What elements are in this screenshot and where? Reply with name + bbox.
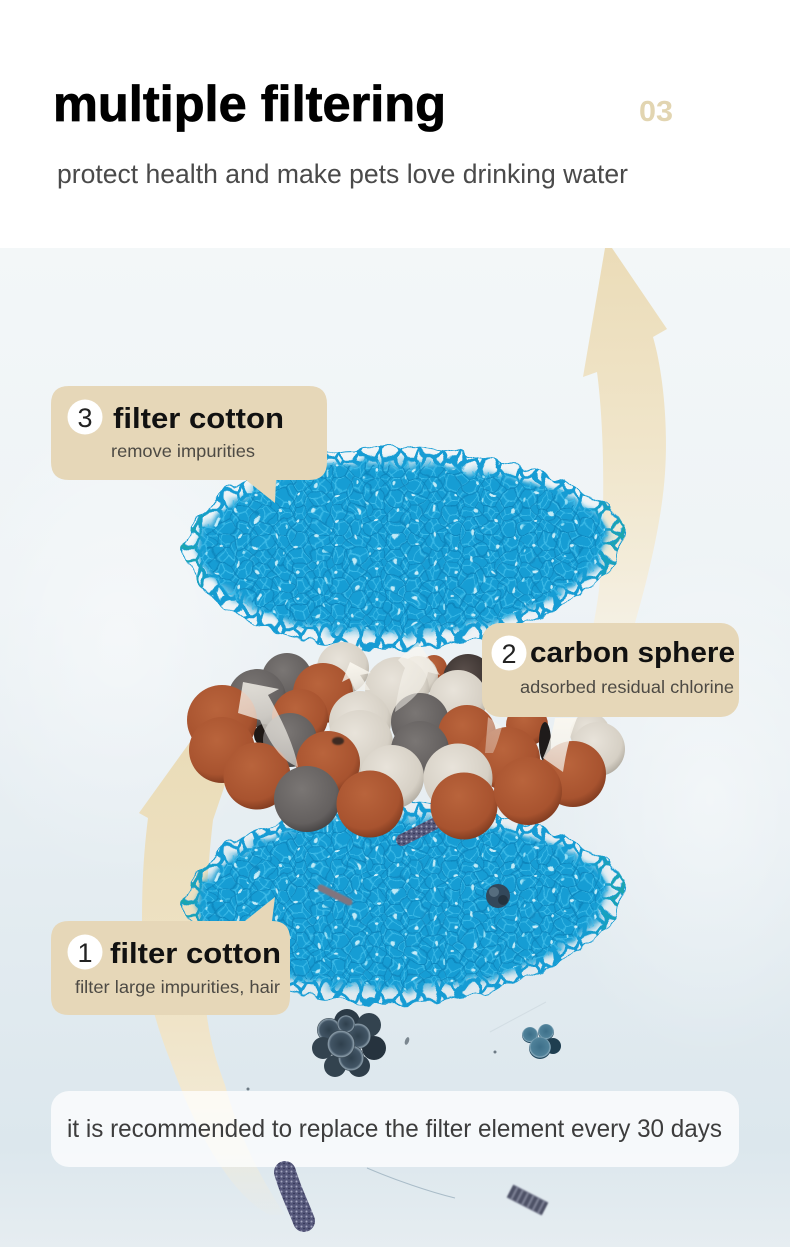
number 2: 2 xyxy=(501,639,517,669)
heading: carbon sphere: carbon sphere xyxy=(530,637,735,669)
text: filter large impurities, hair: filter large impurities, hair xyxy=(75,977,280,997)
particle: large impurity cluster xyxy=(312,1009,386,1077)
top filter cotton sponge xyxy=(184,447,624,648)
recommendation banner xyxy=(51,1091,739,1167)
dark gap right xyxy=(539,722,551,762)
number 3 badge xyxy=(68,400,102,434)
arrow: large right upward flow xyxy=(583,248,667,640)
heading: filter cotton: filter cotton xyxy=(110,938,281,970)
callout: 2 carbon sphere xyxy=(482,623,739,717)
callout: 1 filter cotton xyxy=(51,897,290,1015)
particle: specks and fibre xyxy=(246,1002,546,1198)
bottom filter cotton sponge xyxy=(184,802,624,1003)
carbon spheres cluster xyxy=(187,642,625,840)
dark gap left xyxy=(254,724,274,746)
text: replacement advice: it is recommended to replace the filter element every 30 days xyxy=(67,1115,722,1143)
number 1: 1 xyxy=(77,938,93,968)
subtitle: protect health and make pets love drinking water xyxy=(57,159,628,189)
number 3: 3 xyxy=(77,403,93,433)
particle: hair debris left xyxy=(285,1172,304,1221)
particle: hair debris right xyxy=(510,1191,545,1209)
callout: 3 filter cotton xyxy=(51,386,327,503)
text: remove impurities: remove impurities xyxy=(111,441,255,461)
number 2 badge xyxy=(492,636,526,670)
title: multiple filtering xyxy=(53,76,446,132)
text: adsorbed residual chlorine: adsorbed residual chlorine xyxy=(520,677,734,697)
particles inside bottom sponge xyxy=(321,824,510,908)
page number: 03 xyxy=(639,96,673,128)
particle: small impurity cluster xyxy=(522,1024,561,1059)
small white arrows through spheres xyxy=(238,642,577,772)
arrow: large left upward flow xyxy=(139,742,285,1215)
number 1 badge xyxy=(68,934,102,970)
heading: filter cotton: filter cotton xyxy=(113,403,284,435)
